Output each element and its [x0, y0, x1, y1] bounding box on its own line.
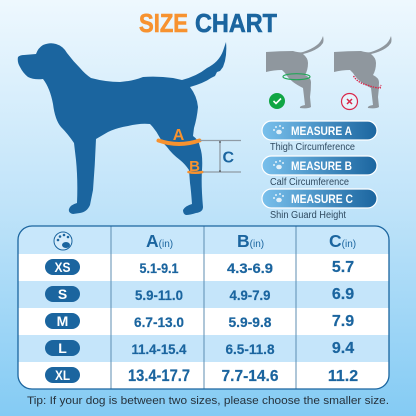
- red dotted line: [354, 76, 381, 88]
- size labels: XL: [55, 367, 70, 383]
- pill: [262, 121, 377, 140]
- grey leg: [266, 36, 324, 108]
- size labels: M: [57, 313, 68, 329]
- column B values: 4.3-6.9: [227, 260, 273, 276]
- column C values: 6.9: [332, 286, 354, 303]
- measure C bracket: [200, 140, 241, 172]
- table rows: [18, 226, 389, 389]
- measure B item: [262, 156, 377, 188]
- description: Calf Circumference: [270, 177, 349, 188]
- measure A band: [158, 140, 200, 144]
- paw icon: [273, 125, 284, 134]
- title: SIZE: [139, 10, 188, 38]
- column A values: 13.4-17.7: [128, 367, 190, 385]
- title: CHART: [195, 10, 277, 38]
- column C values: 9.4: [332, 340, 354, 357]
- label C: C: [222, 150, 234, 166]
- column C values: 5.7: [332, 259, 354, 276]
- size labels: XS: [54, 259, 70, 275]
- pill: [262, 189, 377, 208]
- paw icon: [273, 160, 284, 169]
- column C values: 11.2: [328, 368, 358, 385]
- heading: MEASURE C: [291, 194, 353, 206]
- column C values: [328, 259, 358, 385]
- size labels: [54, 259, 70, 383]
- column B values: 4.9-7.9: [230, 287, 271, 303]
- title: [139, 10, 277, 38]
- green check badge: [269, 93, 285, 109]
- column B values: [222, 260, 279, 385]
- column B values: 6.5-11.8: [226, 341, 275, 357]
- incorrect measuring example: [334, 36, 392, 110]
- measure B band: [188, 171, 202, 174]
- red cross badge: [342, 94, 358, 110]
- size labels: S: [58, 286, 67, 302]
- size labels: L: [58, 340, 67, 356]
- measure A item: [262, 121, 377, 153]
- label A: A: [173, 127, 185, 144]
- dog body: [18, 42, 226, 215]
- description: Shin Guard Height: [270, 210, 346, 221]
- green measuring loop: [283, 74, 310, 80]
- paw header icon: [54, 232, 72, 250]
- pill: [262, 156, 377, 175]
- column headers: [146, 231, 356, 251]
- heading: MEASURE B: [291, 161, 352, 173]
- dog silhouette with measurements: [18, 42, 241, 215]
- column A values: [128, 260, 190, 385]
- column C values: 7.9: [332, 313, 354, 330]
- size table: [18, 226, 389, 389]
- description: Thigh Circumference: [270, 142, 355, 153]
- size pills: [45, 259, 80, 383]
- column A values: 6.7-13.0: [134, 314, 184, 330]
- measure C item: [262, 189, 377, 221]
- label B: B: [189, 158, 200, 175]
- heading: MEASURE A: [291, 126, 352, 138]
- column headers: B(in): [237, 231, 264, 251]
- column A values: 11.4-15.4: [132, 341, 187, 357]
- column B values: 7.7-14.6: [222, 368, 279, 385]
- column B values: 5.9-9.8: [228, 314, 272, 330]
- column headers: C(in): [329, 231, 356, 251]
- column A values: 5.1-9.1: [140, 260, 179, 276]
- grey leg: [334, 36, 392, 108]
- tip text: Tip: If your dog is between two sizes, please choose the smaller size.: [27, 395, 389, 407]
- table border: [18, 226, 389, 389]
- correct measuring example: [266, 36, 324, 109]
- column headers: A(in): [146, 231, 173, 251]
- column A values: 5.9-11.0: [135, 287, 183, 303]
- paw icon: [273, 193, 284, 202]
